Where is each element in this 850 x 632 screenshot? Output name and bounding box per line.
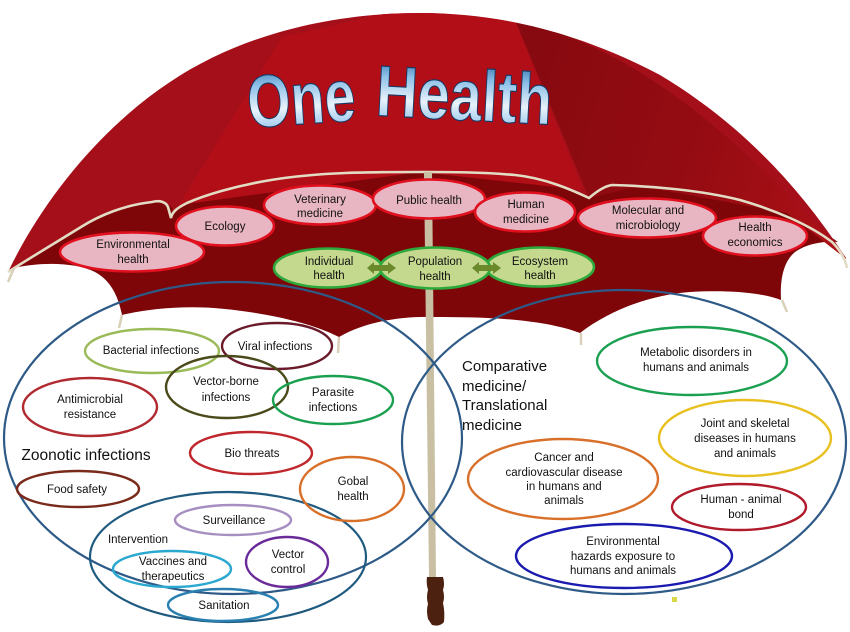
discipline: Environmental health: Environmental — [96, 239, 170, 251]
oval: Parasite infections — [273, 376, 393, 424]
oval: Environmental hazards: humans and animals — [570, 565, 676, 577]
oval: Cancer and cardiovascular disease: Cancer and — [534, 452, 594, 464]
level: Population health — [380, 248, 490, 288]
oval: Viral infections — [222, 323, 332, 369]
oval: Parasite infections: infections — [309, 402, 358, 414]
oval: Joint and skeletal diseases — [659, 400, 831, 476]
arrow: individual to population — [367, 262, 396, 274]
oval: Cancer and cardiovascular disease — [468, 439, 658, 519]
discipline: Molecular and microbiology: microbiology — [616, 220, 681, 232]
oval: Human-animal bond — [672, 484, 806, 530]
oval: Vector-borne infections — [166, 356, 288, 418]
discipline: Public health — [373, 180, 485, 218]
discipline: Health economics: economics — [728, 237, 783, 249]
level: Ecosystem health: health — [524, 270, 556, 282]
level: Individual health — [274, 248, 382, 288]
oval: Joint and skeletal diseases: and animals — [714, 448, 776, 460]
discipline: Veterinary medicine: Veterinary — [294, 194, 346, 206]
oval: Vector control: control — [271, 564, 305, 576]
oval: Environmental hazards: Environmental — [586, 536, 660, 548]
label: Comparative medicine / Translational medicine: Translational — [462, 397, 547, 414]
oval: Vaccines and therapeutics — [113, 551, 231, 587]
oval: Bacterial infections: Bacterial infections — [103, 345, 200, 357]
arrow: population to ecosystem — [472, 262, 501, 274]
oval: Viral infections: Viral infections — [238, 341, 313, 353]
title: One Health — [244, 51, 554, 144]
label: Comparative medicine / Translational medicine: medicine/ — [462, 378, 527, 395]
oval: Human-animal bond: bond — [728, 509, 754, 521]
discipline: Ecology — [176, 206, 274, 246]
oval: Cancer and cardiovascular disease: in humans and — [526, 481, 602, 493]
oval: Vaccines and therapeutics: Vaccines and — [139, 556, 207, 568]
discipline: Environmental health: health — [117, 254, 149, 266]
oval: Environmental hazards: hazards exposure to — [571, 551, 675, 563]
title: One Health: Health — [374, 51, 554, 141]
label: Comparative medicine / Translational medicine: Comparative — [462, 358, 547, 375]
umbrella rim — [8, 172, 847, 272]
discipline: Veterinary medicine — [264, 186, 376, 224]
oval: Environmental hazards — [516, 524, 732, 588]
label: Intervention: Intervention — [108, 534, 168, 546]
oval: Antimicrobial resistance — [23, 378, 157, 436]
level: Population health: health — [419, 271, 451, 283]
discipline: Veterinary medicine: medicine — [297, 208, 343, 220]
oval: Human-animal bond: Human - animal — [700, 494, 782, 506]
discipline: Health economics — [703, 216, 807, 256]
discipline: Ecology: Ecology — [205, 221, 246, 233]
oval: Bio threats: Bio threats — [225, 448, 280, 460]
title: One Health: One — [244, 53, 358, 144]
discipline: Human medicine: medicine — [503, 214, 549, 226]
oval: Antimicrobial resistance: Antimicrobial — [57, 394, 123, 406]
label: Comparative medicine / Translational medicine: medicine — [462, 417, 522, 434]
circle: zoonotic infections — [4, 282, 462, 594]
discipline: Molecular and microbiology — [578, 198, 716, 238]
oval: Antimicrobial resistance: resistance — [64, 409, 116, 421]
oval: Vector-borne infections: infections — [202, 392, 251, 404]
oval: Parasite infections: Parasite — [312, 387, 354, 399]
circle: intervention — [90, 492, 366, 622]
oval: Bio threats — [190, 432, 312, 474]
discipline: Molecular and microbiology: Molecular and — [612, 205, 684, 217]
level: Ecosystem health — [486, 248, 594, 286]
discipline: Public health: Public health — [396, 195, 462, 207]
oval: Metabolic disorders: Metabolic disorders in — [640, 347, 752, 359]
umbrella pole — [424, 172, 436, 577]
oval: Food safety: Food safety — [47, 484, 107, 496]
oval: Bacterial infections — [85, 329, 219, 373]
oval: Joint and skeletal diseases: Joint and skeletal — [701, 418, 789, 430]
oval: Food safety — [17, 471, 139, 507]
label: Comparative medicine / Translational medicine — [462, 358, 547, 434]
circle: comparative medicine — [402, 290, 846, 594]
oval: Vector control — [246, 537, 328, 587]
discipline: Environmental health — [60, 232, 204, 272]
level: Population health: Population — [408, 256, 462, 268]
oval: Metabolic disorders: humans and animals — [643, 362, 749, 374]
oval: Vector control: Vector — [272, 549, 304, 561]
oval: Cancer and cardiovascular disease: cardiovascular disease — [506, 467, 622, 479]
umbrella rib tips — [8, 268, 787, 353]
oval: Gobal health: Gobal — [338, 476, 368, 488]
yellow speck — [672, 597, 677, 602]
oval: Vector-borne infections: Vector-borne — [193, 376, 259, 388]
level: Individual health: health — [313, 270, 345, 282]
umbrella underside — [14, 150, 838, 337]
oval: Metabolic disorders — [597, 327, 787, 395]
oval: Joint and skeletal diseases: diseases in humans — [694, 433, 796, 445]
label: Zoonotic infections: Zoonotic infections — [21, 447, 151, 464]
oval: Surveillance: Surveillance — [203, 515, 265, 527]
discipline: Human medicine — [475, 192, 575, 232]
level: Individual health: Individual — [305, 256, 353, 268]
oval: Sanitation: Sanitation — [198, 600, 250, 612]
umbrella handle — [427, 577, 444, 626]
discipline: Human medicine: Human — [507, 199, 545, 211]
oval: Cancer and cardiovascular disease: animals — [544, 495, 584, 507]
level: Ecosystem health: Ecosystem — [512, 256, 568, 268]
oval: Vaccines and therapeutics: therapeutics — [142, 571, 205, 583]
umbrella canopy — [8, 10, 850, 272]
oval: Gobal health: health — [337, 491, 369, 503]
oval: Surveillance — [175, 505, 291, 535]
discipline: Health economics: Health — [738, 222, 772, 234]
oval: Sanitation — [168, 589, 278, 621]
oval: Gobal health — [300, 457, 404, 521]
